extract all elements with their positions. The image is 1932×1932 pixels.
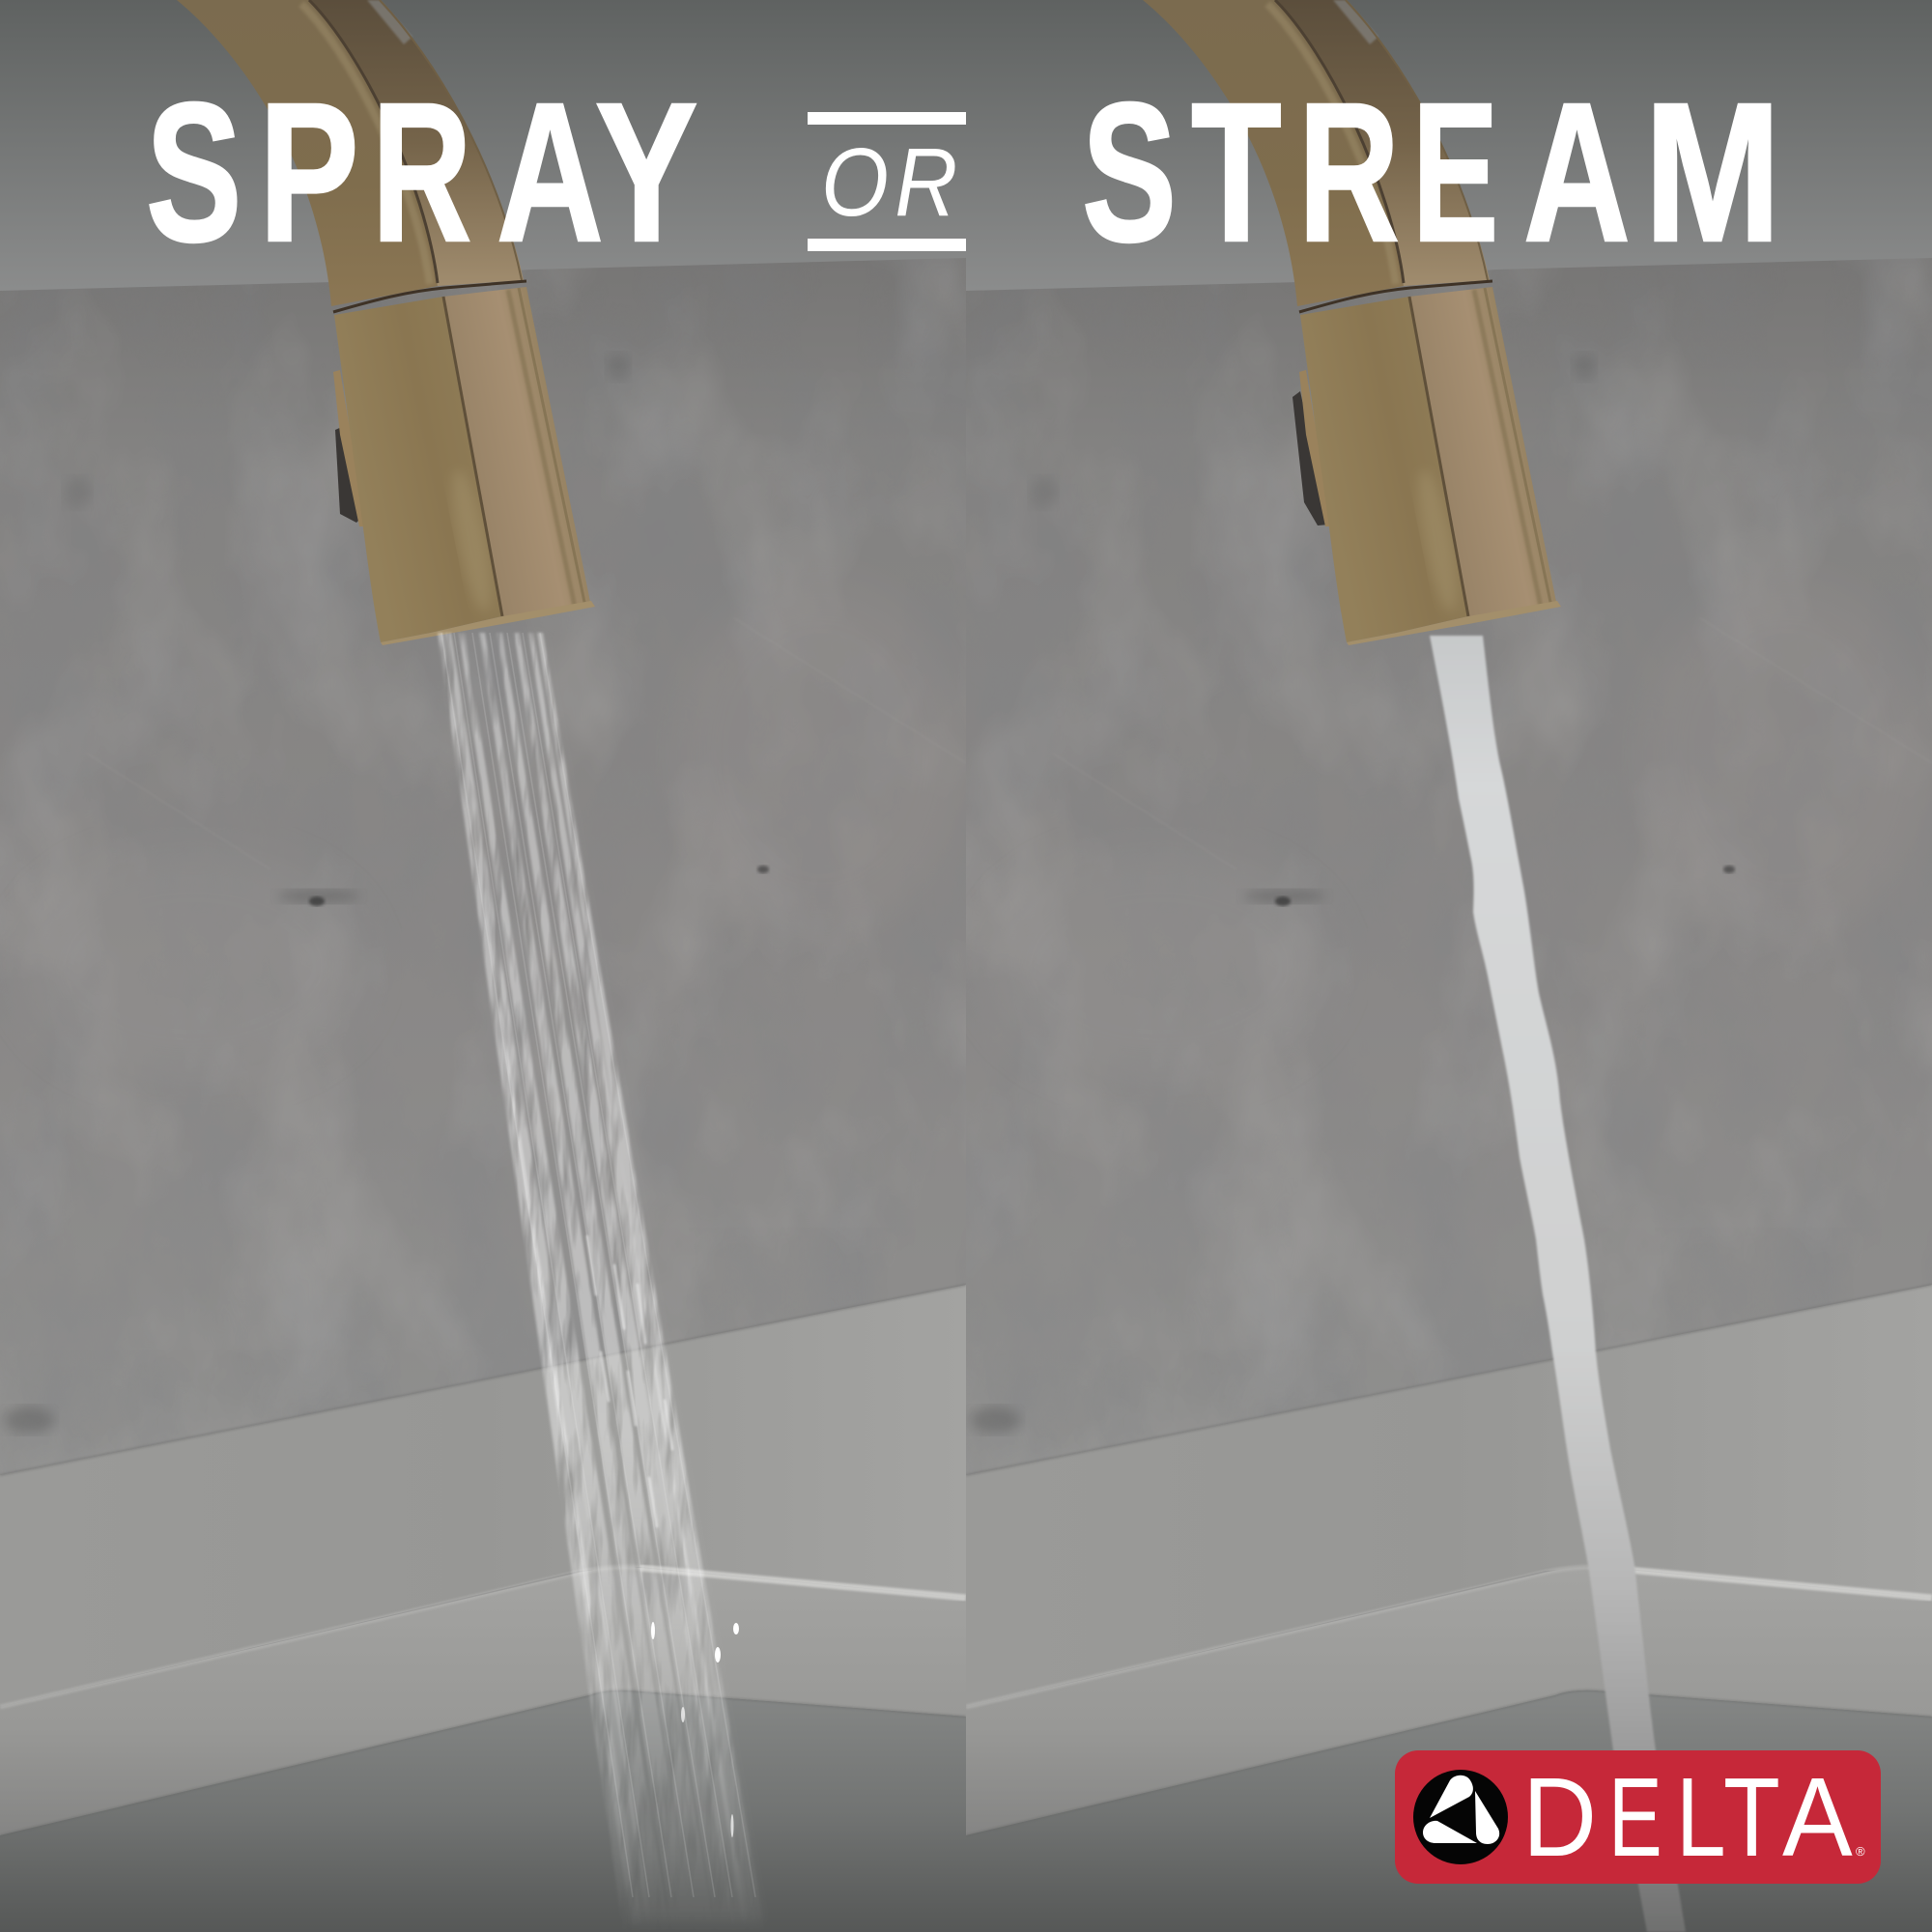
logo wordmark: L — [1676, 1755, 1726, 1880]
stream water column — [1430, 636, 1686, 1932]
logo wordmark: E — [1608, 1756, 1662, 1880]
panel: stream side background — [966, 0, 1932, 1932]
title: SPRAY: A — [497, 62, 604, 283]
panel: stream side faucet — [1143, 0, 1561, 645]
divider word: OR with rules — [808, 112, 966, 251]
title: STREAM: R — [1298, 61, 1400, 283]
title: STREAM: M — [1644, 61, 1781, 283]
logo wordmark: ® — [1856, 1844, 1865, 1859]
spray water streaks — [438, 633, 765, 1932]
title: STREAM: A — [1523, 62, 1631, 283]
title: SPRAY: R — [372, 63, 471, 283]
logo wordmark: A — [1782, 1754, 1853, 1880]
title: SPRAY — [146, 61, 697, 283]
logo wordmark: T — [1723, 1755, 1780, 1880]
panel: spray side faucet — [177, 0, 595, 645]
divider word: OR with rules: OR — [821, 129, 964, 237]
icon: Delta triangle mark — [1413, 1770, 1508, 1864]
title: STREAM: E — [1412, 61, 1498, 283]
title: SPRAY: S — [146, 62, 242, 282]
logo wordmark — [1522, 1754, 1865, 1880]
panel: spray side background — [0, 0, 966, 1932]
title: SPRAY: Y — [595, 62, 697, 283]
icon: dark trigger button, spray side — [335, 426, 359, 523]
title: STREAM — [1082, 61, 1781, 283]
title: STREAM: S — [1082, 62, 1177, 283]
logo: Delta badge — [1395, 1750, 1881, 1884]
title: STREAM: T — [1191, 62, 1282, 283]
icon: dark trigger button, stream side — [1293, 391, 1329, 526]
logo wordmark: D — [1522, 1754, 1597, 1880]
title: SPRAY: P — [259, 61, 359, 283]
